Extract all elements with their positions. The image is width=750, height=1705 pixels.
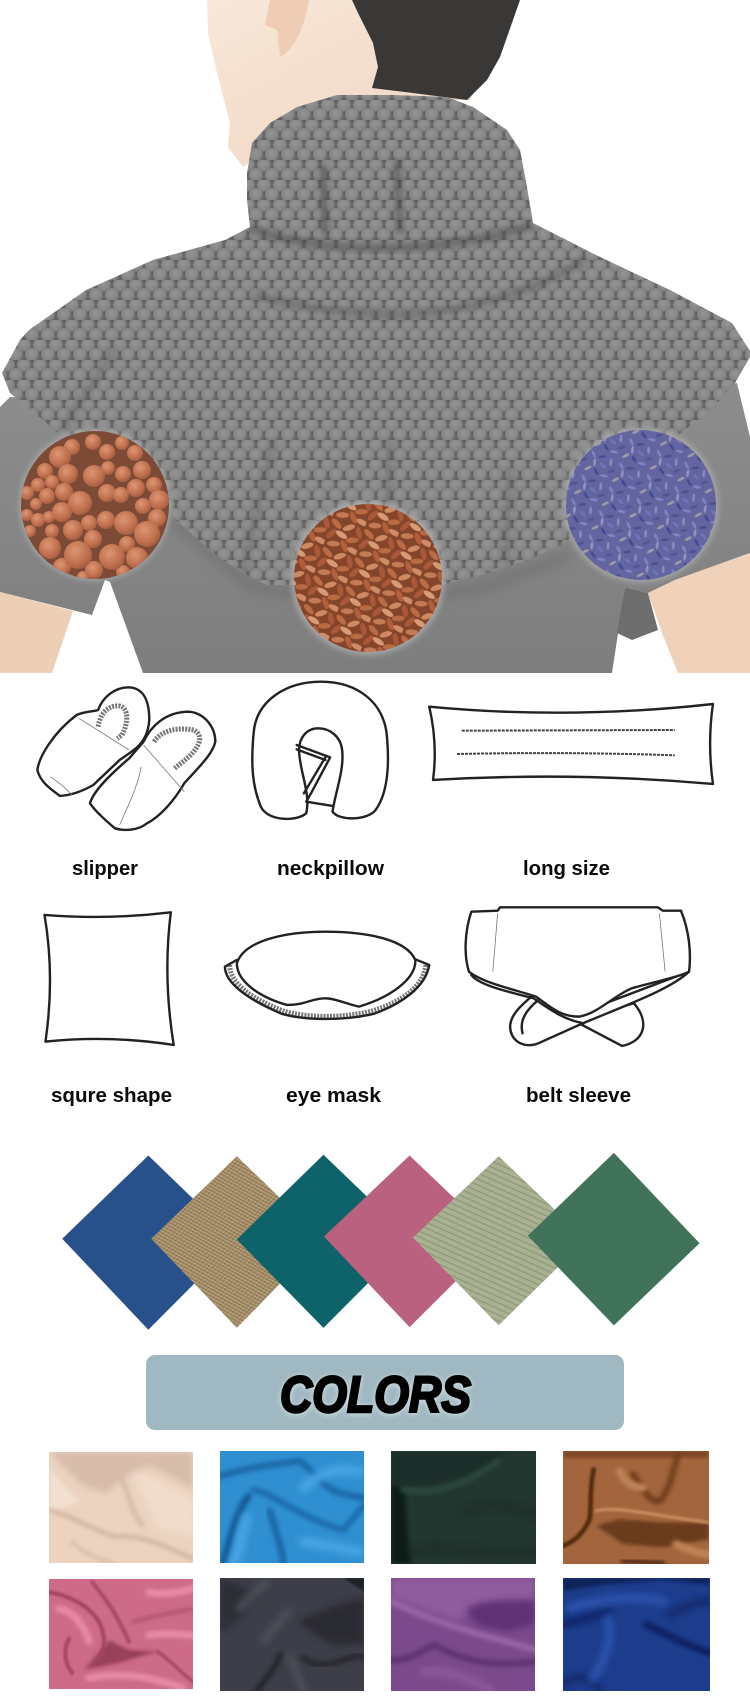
panel: diamond fabric samples: [62, 1153, 700, 1330]
panel: product shape line drawings: [37, 682, 713, 1107]
swatch: rose pink: [49, 1579, 193, 1689]
panel: hero photo of woman wearing the neck wrap: [0, 0, 750, 673]
ingredient circle: clay balls: [19, 429, 171, 583]
t-shirt: [0, 383, 750, 673]
label: slipper: slipper: [72, 858, 138, 880]
icon: belt sleeve: [466, 907, 690, 1046]
ingredient circle: flax seeds: [291, 501, 445, 655]
neck and head skin: [207, 0, 473, 167]
swatch: dark green: [391, 1451, 536, 1564]
swatch: teal: [237, 1155, 412, 1328]
hair: [352, 0, 520, 100]
swatch: sky blue: [220, 1451, 364, 1563]
right arm: [648, 553, 750, 673]
icon: eye mask: [225, 932, 429, 1019]
panel: fabric colour swatches: [49, 1451, 710, 1691]
label: belt sleeve: belt sleeve: [526, 1085, 631, 1107]
label: eye mask: eye mask: [286, 1085, 382, 1107]
swatch: royal blue: [563, 1578, 710, 1691]
grey bobble neck and shoulder wrap: [2, 95, 750, 585]
swatch: tan tweed: [151, 1156, 323, 1328]
label: neckpillow: neckpillow: [277, 858, 384, 880]
swatch: brown: [563, 1451, 709, 1564]
swatch: forest green: [528, 1153, 700, 1325]
folded cloth tail at the right: [617, 587, 658, 640]
wrap shadow on shirt: [170, 520, 570, 596]
icon: neck pillow: [252, 682, 388, 819]
banner: colors heading: [146, 1355, 624, 1430]
title text: COLORS: COLORS: [280, 1366, 471, 1423]
label: squre shape: squre shape: [51, 1085, 172, 1107]
ingredient circle: lavender: [563, 427, 719, 583]
swatch: sage corduroy: [413, 1156, 586, 1325]
swatch: pink: [324, 1155, 498, 1327]
swatch: peach: [49, 1452, 193, 1563]
icon: slipper: [37, 687, 215, 830]
swatch: navy blue: [62, 1155, 234, 1330]
label: long size: long size: [523, 858, 610, 880]
icon: long size pillow: [429, 704, 713, 784]
swatch: charcoal: [220, 1578, 364, 1691]
ear: [265, 0, 309, 57]
icon: square pillow: [45, 912, 174, 1045]
left arm: [0, 592, 73, 673]
swatch: purple: [391, 1578, 535, 1691]
